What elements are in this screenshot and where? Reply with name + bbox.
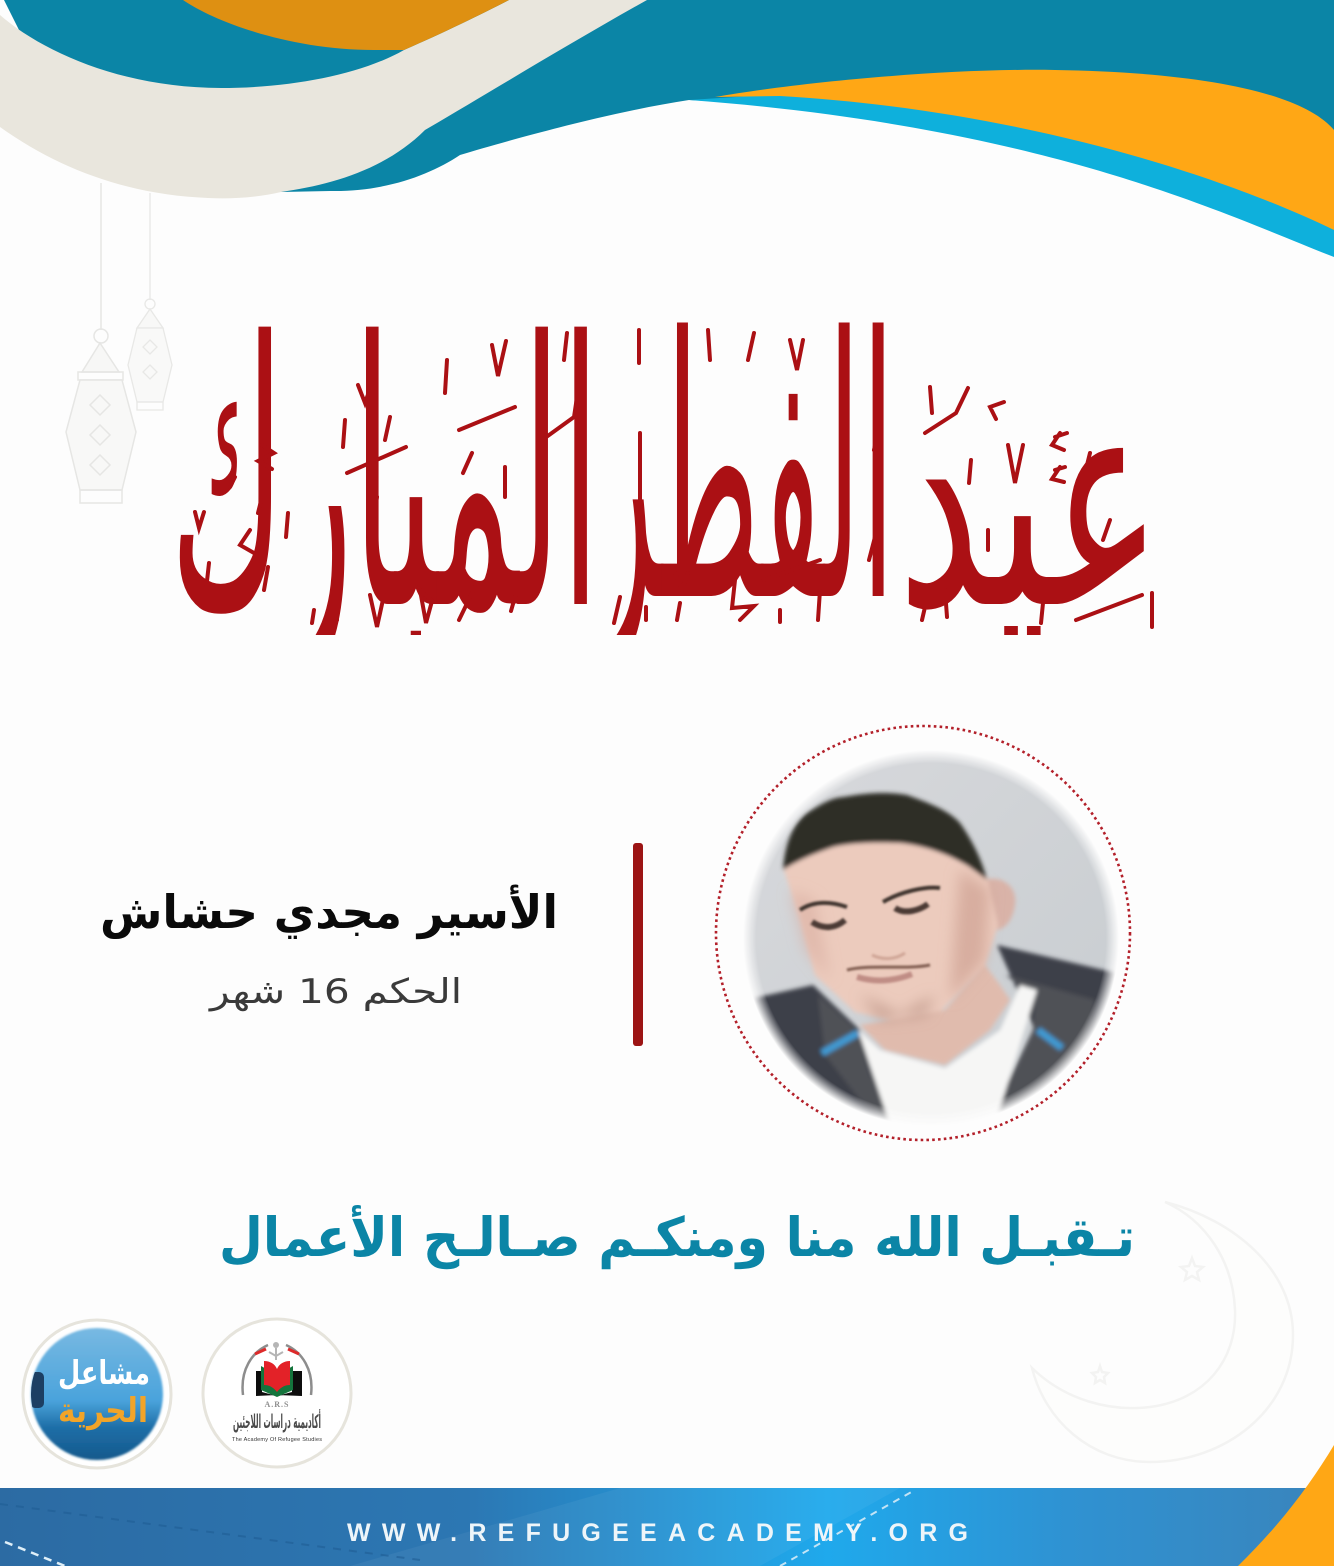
face and neck xyxy=(783,840,998,1022)
title calligraphy: Eid al-Fitr al-Mubarak xyxy=(180,322,1154,635)
title calligraphy: Eid al-Fitr al-Mubarak: المبارك xyxy=(170,266,600,695)
hood inner xyxy=(818,974,1094,1112)
closing greeting: تـقبـل الله منا ومنكـم صـالـح الأعمال xyxy=(219,1205,1135,1269)
english academy name: The Academy Of Refugee Studies xyxy=(232,1437,322,1443)
portrait photo xyxy=(746,752,1117,1120)
word: eid: عيد xyxy=(898,326,1162,675)
decorative marks around the calligraphy xyxy=(195,330,1152,627)
portrait frame dotted circle xyxy=(716,726,1130,1140)
moustache and mouth xyxy=(847,965,930,970)
blue collar stripes xyxy=(822,1030,1062,1053)
eyebrows xyxy=(800,888,940,910)
logo: Mashael al-Hurriya xyxy=(23,1320,171,1468)
lantern hanging left large xyxy=(66,183,136,503)
orange corner accent xyxy=(1238,1445,1334,1566)
logo: Academy of Refugee Studies: أكاديمية دراسات اللاجئين xyxy=(233,1409,321,1433)
jacket xyxy=(754,942,1114,1118)
top wave banner xyxy=(0,0,1334,257)
crescent moon watermark xyxy=(1032,1202,1293,1462)
logo: Mashael al-Hurriya: الحرية xyxy=(58,1391,148,1431)
vertical red divider xyxy=(633,843,643,1046)
emblem letters: A.R.S xyxy=(264,1400,290,1409)
hair xyxy=(783,793,987,880)
sentence line: الحكم 16 شهر xyxy=(208,972,462,1012)
logo wording: مشاعل xyxy=(58,1353,150,1392)
website address: WWW.REFUGEEACADEMY.ORG xyxy=(347,1519,979,1547)
prisoner name: الأسير مجدي حشاش xyxy=(100,884,558,939)
footer band xyxy=(0,1488,1334,1566)
face shading xyxy=(950,870,990,1000)
open book emblem xyxy=(243,1342,311,1397)
white shirt xyxy=(858,985,1037,1140)
ear xyxy=(985,879,1015,930)
lantern hanging left small xyxy=(128,193,172,410)
logo: Academy of Refugee Studies xyxy=(203,1319,351,1467)
eyes xyxy=(812,904,928,927)
